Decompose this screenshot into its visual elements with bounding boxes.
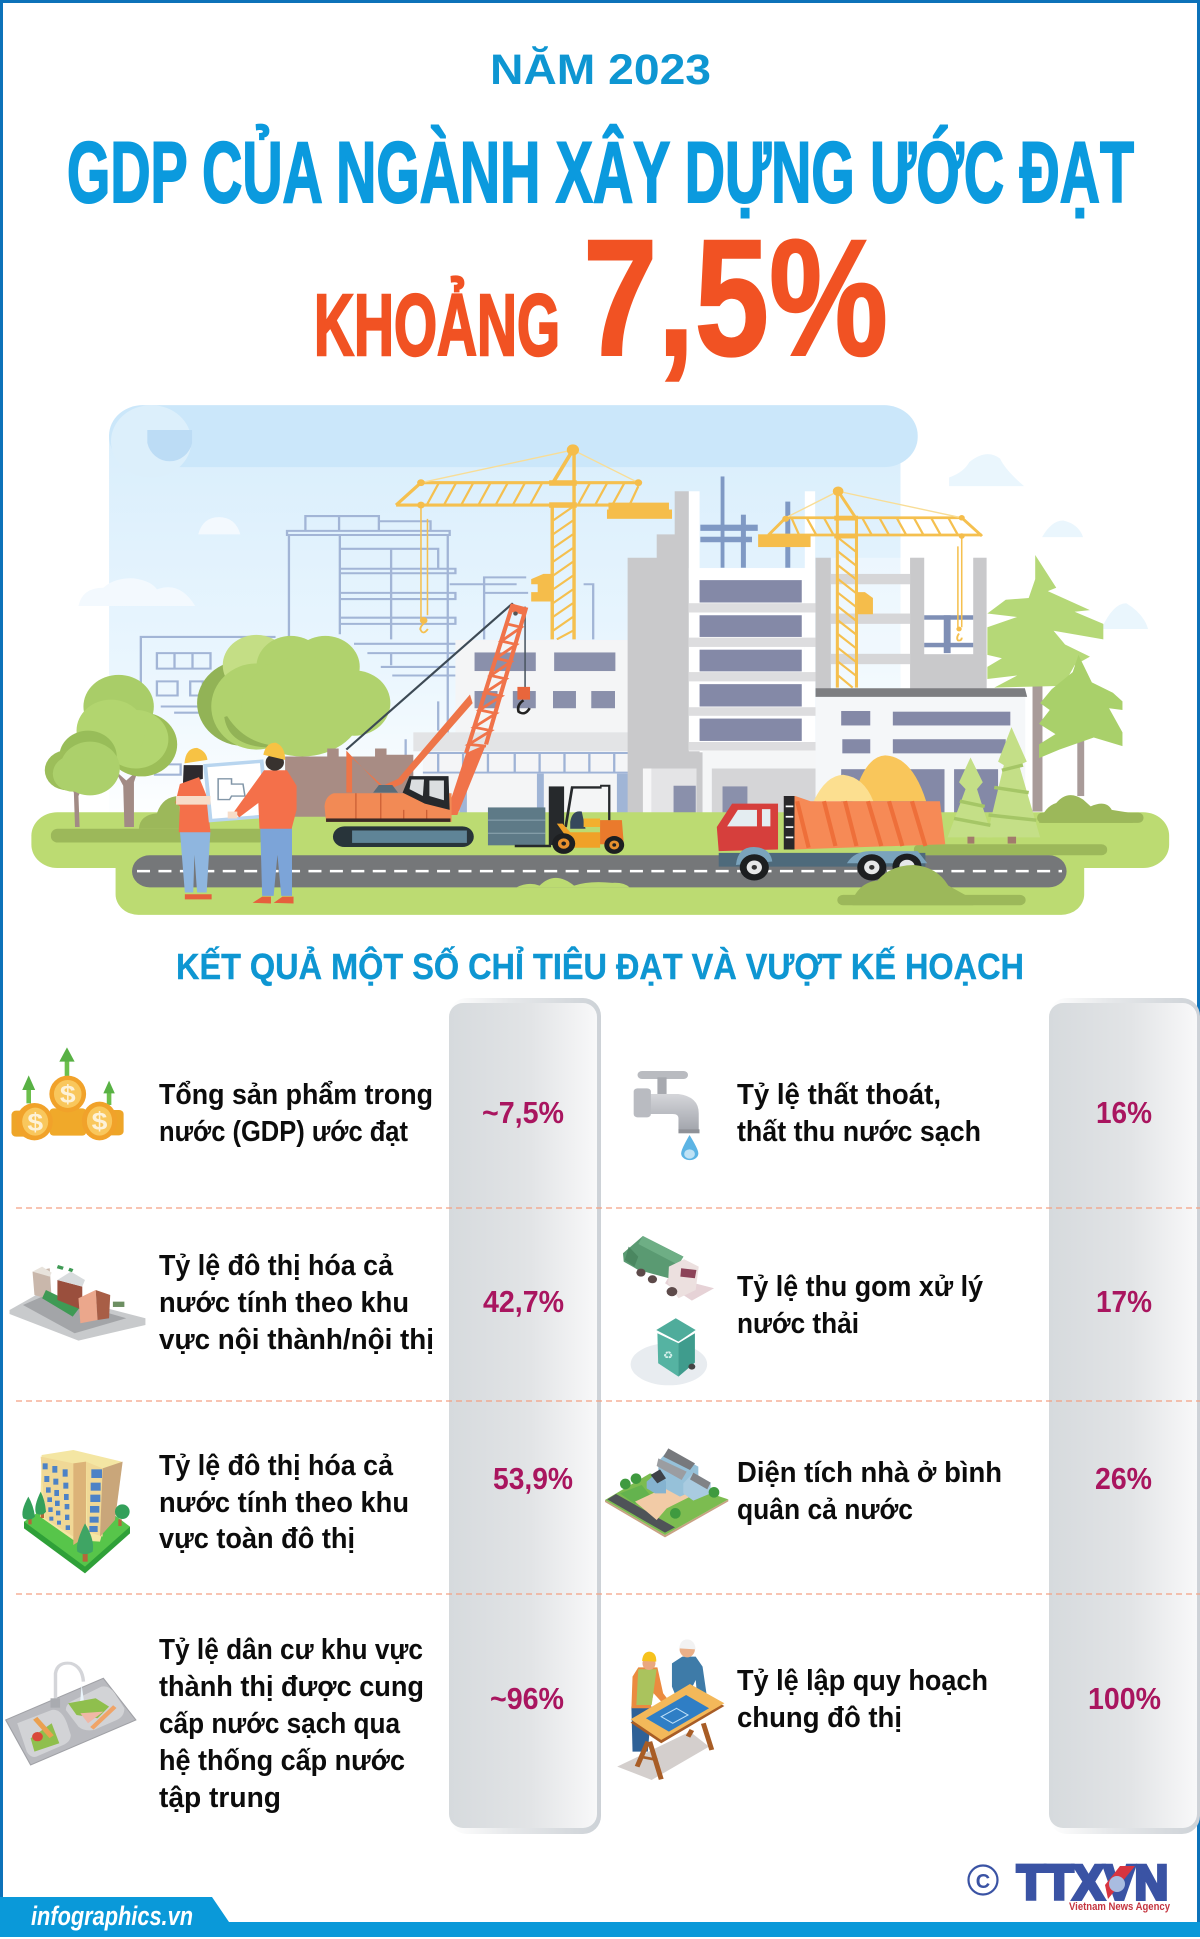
title: about 7.5 percent xyxy=(314,206,888,391)
label: housing area: Diện tích nhà ở bình xyxy=(737,1457,1002,1489)
value: clean water supply: ~96% xyxy=(490,1681,564,1716)
label: housing area: quân cả nước xyxy=(737,1494,913,1526)
row: urban planning xyxy=(617,1639,1161,1780)
label: urbanisation whole area: Tỷ lệ đô thị hóa cả xyxy=(159,1450,394,1482)
label: wastewater: Tỷ lệ thu gom xử lý xyxy=(737,1271,983,1303)
label: urbanisation inner city: Tỷ lệ đô thị hóa cả xyxy=(159,1250,394,1282)
icon: garbage truck and recycle bin xyxy=(623,1236,714,1385)
row: wastewater xyxy=(623,1236,1152,1385)
section heading: KẾT QUẢ MỘT SỐ CHỈ TIÊU ĐẠT VÀ VƯỢT KẾ HOẠCH xyxy=(176,945,1024,987)
value: water loss: 16% xyxy=(1096,1095,1152,1130)
icon: gold coins with arrows: $ xyxy=(60,1080,76,1108)
dump truck xyxy=(717,796,945,880)
label: GDP: Tổng sản phẩm trong xyxy=(159,1079,433,1111)
heading: year: NĂM 2023 xyxy=(490,46,711,94)
trees, left xyxy=(45,675,177,827)
big bush xyxy=(197,635,390,756)
value: urbanisation inner city: 42,7% xyxy=(483,1284,564,1319)
label: clean water supply: hệ thống cấp nước xyxy=(159,1745,405,1777)
value: urbanisation whole area: 53,9% xyxy=(493,1461,573,1496)
icon: isometric house xyxy=(605,1448,728,1537)
footer text: website: infographics.vn xyxy=(31,1901,193,1931)
label: urbanisation whole area: vực toàn đô thị xyxy=(159,1523,355,1555)
row: water loss xyxy=(634,1071,1152,1160)
icon: water tap xyxy=(634,1071,700,1160)
value: housing area: 26% xyxy=(1095,1461,1152,1496)
label: water loss: Tỷ lệ thất thoát, xyxy=(737,1079,941,1111)
tower crane, back xyxy=(396,444,672,639)
row: clean water supply xyxy=(6,1634,564,1814)
small pines xyxy=(948,727,1040,844)
label: wastewater: nước thải xyxy=(737,1308,859,1340)
front bush xyxy=(853,865,973,905)
label: clean water supply: tập trung xyxy=(159,1782,281,1814)
label: urbanisation inner city: nước tính theo khu xyxy=(159,1287,409,1319)
row: housing area xyxy=(605,1448,1152,1537)
title: about 7.5 percent: KHOẢNG xyxy=(314,277,560,374)
value: GDP: ~7,5% xyxy=(482,1095,564,1130)
icon: kitchen sink with vegetables xyxy=(6,1663,136,1765)
label: urbanisation inner city xyxy=(159,1250,434,1356)
crawler crane xyxy=(325,603,530,847)
label: GDP: nước (GDP) ước đạt xyxy=(159,1116,408,1148)
panel: right values column xyxy=(1049,998,1200,1834)
wooden fence xyxy=(285,749,413,817)
label: urbanisation inner city: vực nội thành/nội thị xyxy=(159,1324,434,1356)
label: clean water supply: Tỷ lệ dân cư khu vực xyxy=(159,1634,423,1666)
label: urban planning xyxy=(737,1665,988,1734)
small bush on the road edge xyxy=(517,878,630,887)
logo: TTXVN, Vietnam News Agency: Vietnam News Agency xyxy=(1069,1901,1171,1913)
copyright mark: C xyxy=(976,1871,990,1893)
outline buildings xyxy=(138,516,593,775)
footer bar xyxy=(0,1897,1200,1937)
label: wastewater xyxy=(737,1271,983,1340)
label: clean water supply: thành thị được cung xyxy=(159,1671,424,1703)
icon: gold coins with arrows xyxy=(11,1047,124,1140)
white building, left of core xyxy=(413,640,631,836)
label: clean water supply: cấp nước sạch qua xyxy=(159,1708,401,1740)
road xyxy=(132,855,1067,887)
label: water loss: thất thu nước sạch xyxy=(737,1116,981,1148)
value: wastewater: 17% xyxy=(1096,1284,1152,1319)
hedge bars xyxy=(51,795,1144,905)
label: urban planning: chung đô thị xyxy=(737,1702,902,1734)
label: clean water supply xyxy=(159,1634,424,1814)
clouds xyxy=(78,454,1148,629)
icon: gold coins with arrows: $ xyxy=(27,1108,43,1136)
title: about 7.5 percent: 7,5% xyxy=(583,206,888,391)
stack of steel sheets xyxy=(488,807,545,845)
icon: apartment building xyxy=(22,1450,130,1573)
icon: garbage truck and recycle bin: ♻ xyxy=(663,1349,673,1361)
row: urbanisation, inner city xyxy=(10,1250,564,1356)
label: urbanisation whole area: nước tính theo khu xyxy=(159,1487,409,1519)
workers with blueprint xyxy=(175,743,297,904)
main concrete building under construction xyxy=(628,476,833,837)
label: water loss xyxy=(737,1079,981,1148)
illustration: construction site xyxy=(31,405,1169,915)
icon: engineers at a planning table xyxy=(617,1639,724,1780)
low white office building xyxy=(816,688,1027,836)
tower crane, front xyxy=(758,486,982,688)
label: GDP xyxy=(159,1079,433,1148)
row: urbanisation, whole urban area xyxy=(22,1450,573,1573)
right concrete frame xyxy=(816,558,987,689)
label: housing area xyxy=(737,1457,1002,1526)
copyright mark xyxy=(968,1866,998,1894)
value: urban planning: 100% xyxy=(1088,1681,1161,1716)
sand piles xyxy=(814,755,926,801)
logo: TTXVN, Vietnam News Agency: TTXVN xyxy=(1017,1857,1168,1910)
pine trees, right xyxy=(987,555,1122,812)
panel: left values column xyxy=(449,998,601,1834)
ground xyxy=(31,812,1169,915)
icon: isometric city block xyxy=(10,1267,145,1341)
label: urbanisation whole area xyxy=(159,1450,409,1555)
row: GDP xyxy=(11,1047,564,1148)
icon: gold coins with arrows: $ xyxy=(92,1107,108,1135)
label: urban planning: Tỷ lệ lập quy hoạch xyxy=(737,1665,988,1697)
forklift xyxy=(515,786,624,854)
blueprint sky background xyxy=(109,405,918,827)
